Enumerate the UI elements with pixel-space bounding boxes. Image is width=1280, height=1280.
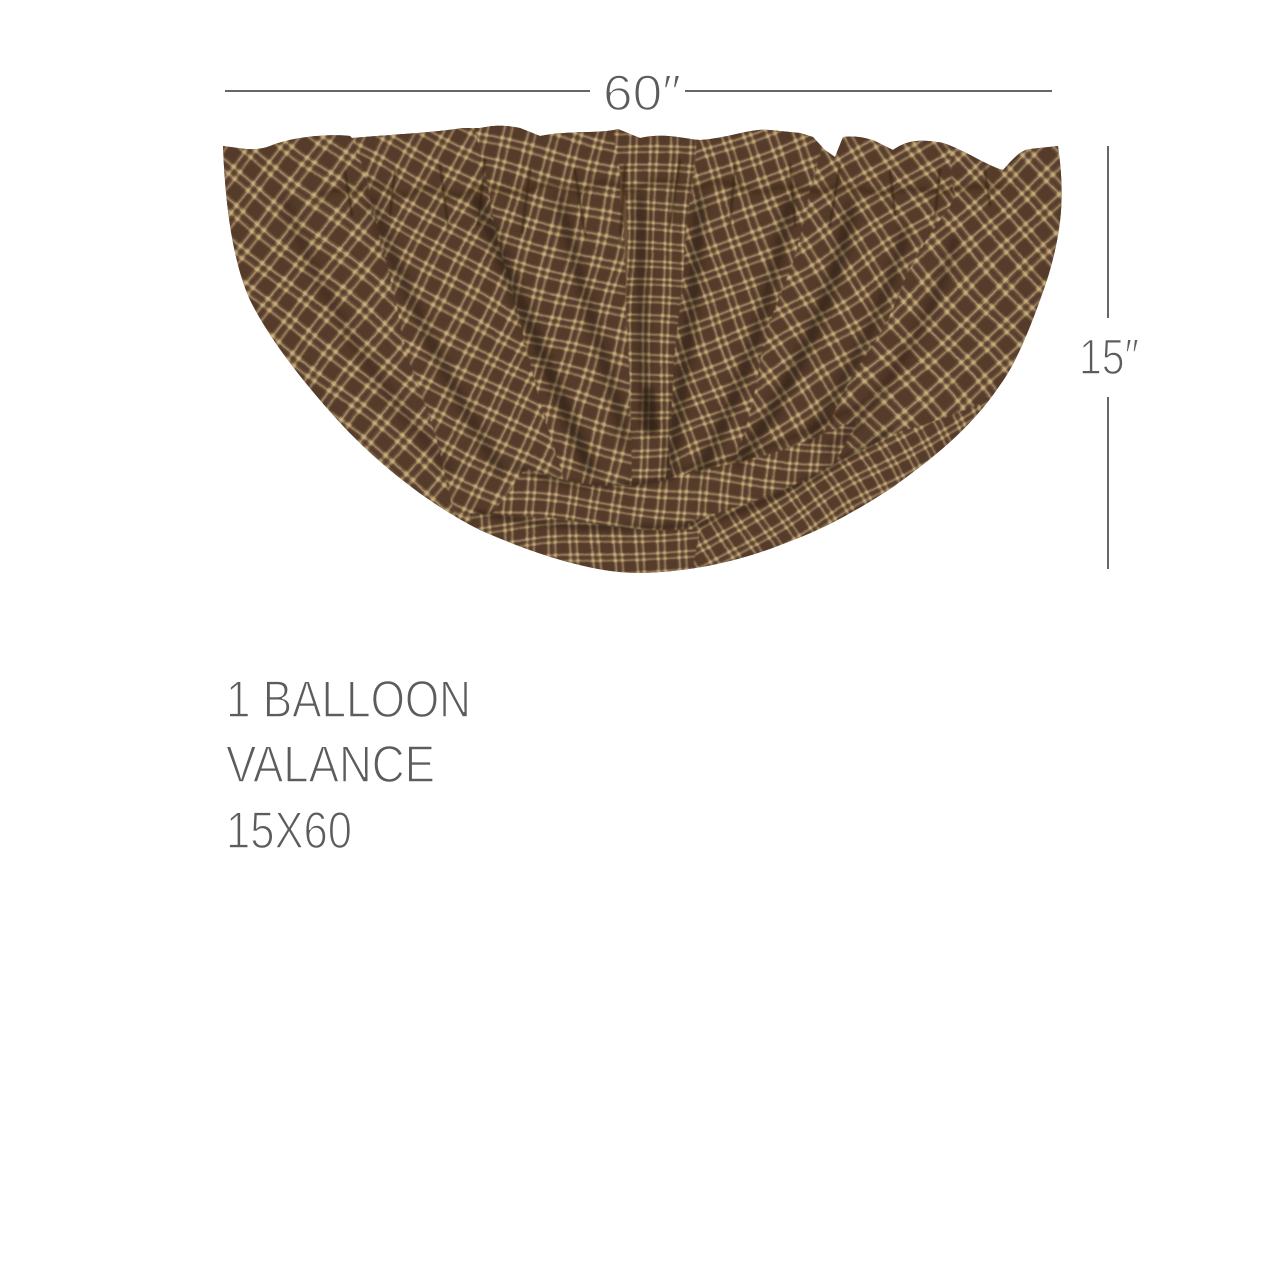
soft fold shadows	[285, 200, 955, 528]
gathered rod pocket stitching	[320, 160, 1000, 245]
line: 1 balloon: 1 BALLOON	[226, 671, 471, 729]
product image: plaid balloon valance	[223, 126, 1062, 573]
dimension: width 60 inches: 60″	[603, 65, 681, 121]
centre pull-up knot	[666, 452, 671, 472]
infographic canvas	[223, 76, 1138, 848]
dimension: height 15 inches: 15″	[1079, 329, 1139, 385]
centre-right fabric panel	[665, 130, 822, 480]
centre fabric panel	[614, 129, 697, 486]
right outer fabric panel	[824, 146, 1062, 462]
left outer fabric panel	[223, 135, 456, 516]
right swag fold	[686, 400, 989, 568]
product description text	[226, 671, 471, 860]
woven fabric panels	[223, 126, 1062, 573]
right inner fabric panel	[735, 136, 954, 462]
bottom swag fold	[469, 512, 700, 573]
line: valance: VALANCE	[226, 736, 435, 794]
lower swag fold	[492, 420, 858, 530]
left inner fabric panel	[352, 128, 564, 526]
centre-left fabric panel	[474, 126, 633, 486]
line: size: 15X60	[226, 802, 352, 860]
